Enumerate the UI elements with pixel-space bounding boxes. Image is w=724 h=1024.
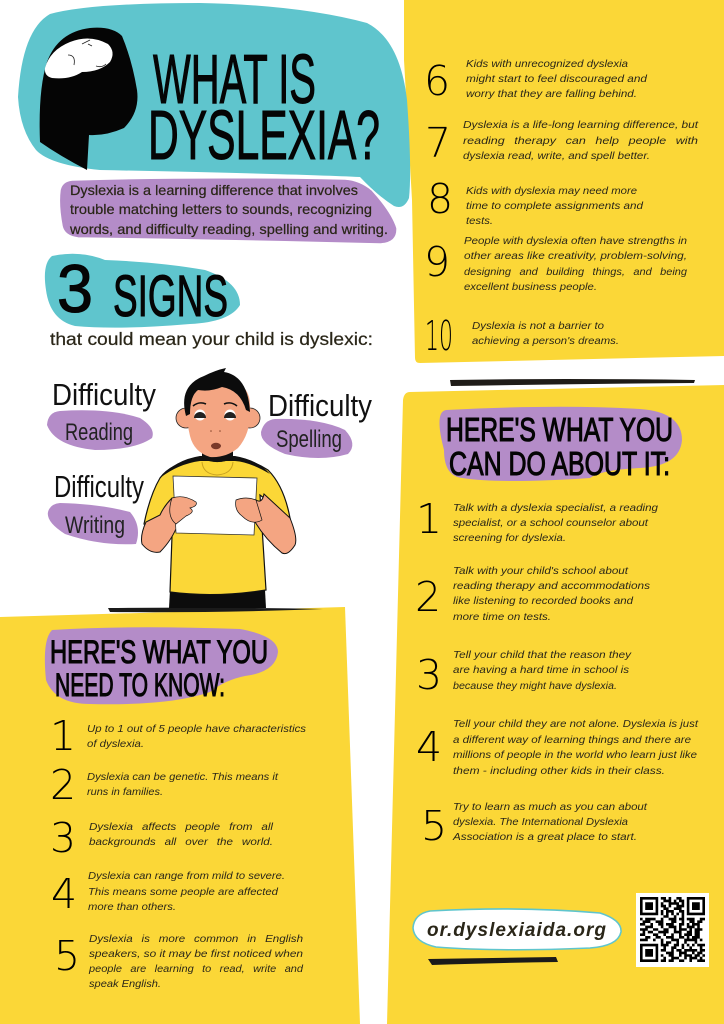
action 1: screening for dyslexia. [453,533,566,544]
fact 6 [424,57,647,105]
fact 9: People with dyslexia often have strengths in [464,236,687,247]
fact 5: 5 [54,932,80,980]
heading blob: here's what you need to know: NEED TO KNOW: [55,667,225,703]
action 5: dyslexia. The International Dyslexia [453,817,628,828]
fact 7: dyslexia read, write, and spell better. [463,151,650,162]
3 signs heading blob [45,251,240,329]
fact 8: tests. [466,216,493,227]
fact 7 [425,119,699,167]
3 signs heading blob: 3 [57,251,93,327]
fact 10: achieving a person's dreams. [472,336,619,347]
subheading: that could mean your child is dyslexic: [50,329,373,349]
action 5: Try to learn as much as you can about [453,802,648,813]
fact 8: 8 [427,175,453,223]
fact 8: Kids with dyslexia may need more [466,186,637,197]
fact 1: of dyslexia. [87,739,144,750]
sign: difficulty writing: Difficulty [54,469,144,504]
brush stroke divider between right panels [450,379,695,386]
sign: difficulty reading [47,377,156,450]
fact 8 [427,175,643,227]
collar [202,462,233,475]
fact 3 [50,814,274,862]
fact 3: 3 [50,814,76,862]
3 signs heading blob: SIGNS [113,264,228,329]
heading blob: here's what you can do about it [439,407,682,482]
fact 2: runs in families. [87,787,163,798]
hair [184,368,250,416]
action 4 [416,719,699,777]
sign: difficulty writing: Writing [65,512,125,539]
fact 7: 7 [425,119,451,167]
title text: WHAT IS [153,40,316,118]
fact 9: designing and building things, and being [464,267,687,278]
fact 5: speakers, so it may be first noticed when [89,949,303,960]
title speech bubble [18,3,410,207]
fact 3: Dyslexia affects people from all [89,822,274,833]
fact 2: Dyslexia can be genetic. This means it [87,772,279,783]
trousers [169,590,266,608]
action 3: 3 [416,651,442,699]
action 2: Talk with your child's school about [453,566,629,577]
heading blob: here's what you need to know [45,627,278,704]
action 4: millions of people in the world who learn just like [453,750,697,761]
action 4: a different way of learning things and there are [453,735,691,746]
fact 1: 1 [50,712,76,760]
fact 5 [54,932,303,990]
action 2: more time on tests. [453,612,551,623]
action 4: them - including other kids in their class. [453,766,665,777]
face [187,378,250,457]
QR code [636,893,709,967]
title text [148,40,380,174]
icon: head silhouette with brain [40,28,137,170]
fact 9: 9 [424,238,450,286]
sign: difficulty spelling [261,388,372,458]
action 1: 1 [416,495,442,543]
shirt [144,457,290,595]
action 1: Talk with a dyslexia specialist, a reading [453,503,658,514]
fact 3: backgrounds all over the world. [89,837,273,848]
action 3: because they might have dyslexia. [453,681,617,692]
fact 1: Up to 1 out of 5 people have characteristics [87,724,306,735]
left arm [142,498,196,552]
sign: difficulty spelling: Spelling [276,426,342,453]
sign: difficulty spelling: Difficulty [268,388,372,423]
website link pill: or.dyslexiaida.org [427,920,606,941]
fact 2: 2 [50,761,76,809]
sign: difficulty writing [48,469,144,544]
sign: difficulty reading: Reading [65,419,133,446]
intro purple box [59,178,397,244]
action 3: Tell your child that the reason they [453,650,632,661]
illustration: child reading paper [108,368,323,612]
fact 4: more than others. [88,902,176,913]
fact 8: time to complete assignments and [466,201,643,212]
eyes [193,403,237,420]
sign: difficulty reading: Difficulty [52,377,156,412]
action 3 [416,650,632,699]
action 2: 2 [415,573,441,621]
website link pill [413,909,621,950]
fact 10: 10 [425,312,453,360]
right arm [236,494,296,554]
paper [173,476,257,535]
fact 9 [424,236,687,293]
neck [202,448,233,462]
fact 6: 6 [424,57,450,105]
fact 1 [50,712,306,760]
fact 7: Dyslexia is a life-long learning difference, but [463,120,699,131]
ears [176,408,196,428]
fact 4: Dyslexia can range from mild to severe. [88,871,285,882]
fact 5: people are learning to read, write and [88,964,303,975]
fact 6: might start to feel discouraged and [466,74,647,85]
nose and mouth [210,430,221,449]
action 2 [415,566,650,623]
action 5: 5 [421,802,447,850]
ground brush stroke [108,608,323,612]
action 1 [416,495,658,544]
panel: need to know [0,607,360,1024]
brush stroke under link [428,957,558,965]
intro purple box: words, and difficulty reading, spelling and writing. [69,222,388,237]
panel: facts 6 to 10 [404,0,724,363]
fact 9: excellent business people. [464,282,597,293]
fact 6: Kids with unrecognized dyslexia [466,59,628,70]
fact 10 [425,312,619,360]
action 3: are having a hard time in school is [453,665,629,676]
fact 10: Dyslexia is not a barrier to [472,321,604,332]
fact 7: reading therapy can help people with [463,136,698,147]
fact 5: Dyslexia is more common in English [89,934,303,945]
fact 4: This means some people are affected [88,887,278,898]
fact 6: worry that they are falling behind. [466,89,637,100]
intro purple box: Dyslexia is a learning difference that involves [70,183,358,198]
action 4: Tell your child they are not alone. Dyslexia is just [453,719,699,730]
action 4: 4 [416,723,442,771]
fact 2 [50,761,279,809]
fact 4: 4 [51,870,77,918]
fact 9: other areas like creativity, problem-solving, [464,251,687,262]
intro purple box: trouble matching letters to sounds, recognizing [70,202,372,217]
title text: DYSLEXIA? [148,96,380,174]
action 2: like listening to recorded books and [453,596,633,607]
action 5: Association is a great place to start. [452,832,637,843]
hands on paper [170,497,196,524]
panel: what you can do [387,385,724,1024]
fact 4 [51,870,285,918]
heading blob: here's what you need to know: HERE'S WHAT YOU [50,634,268,670]
action 5 [421,802,648,850]
action 1: specialist, or a school counselor about [453,518,649,529]
action 2: reading therapy and accommodations [453,581,650,592]
fact 5: speak English. [89,979,161,990]
